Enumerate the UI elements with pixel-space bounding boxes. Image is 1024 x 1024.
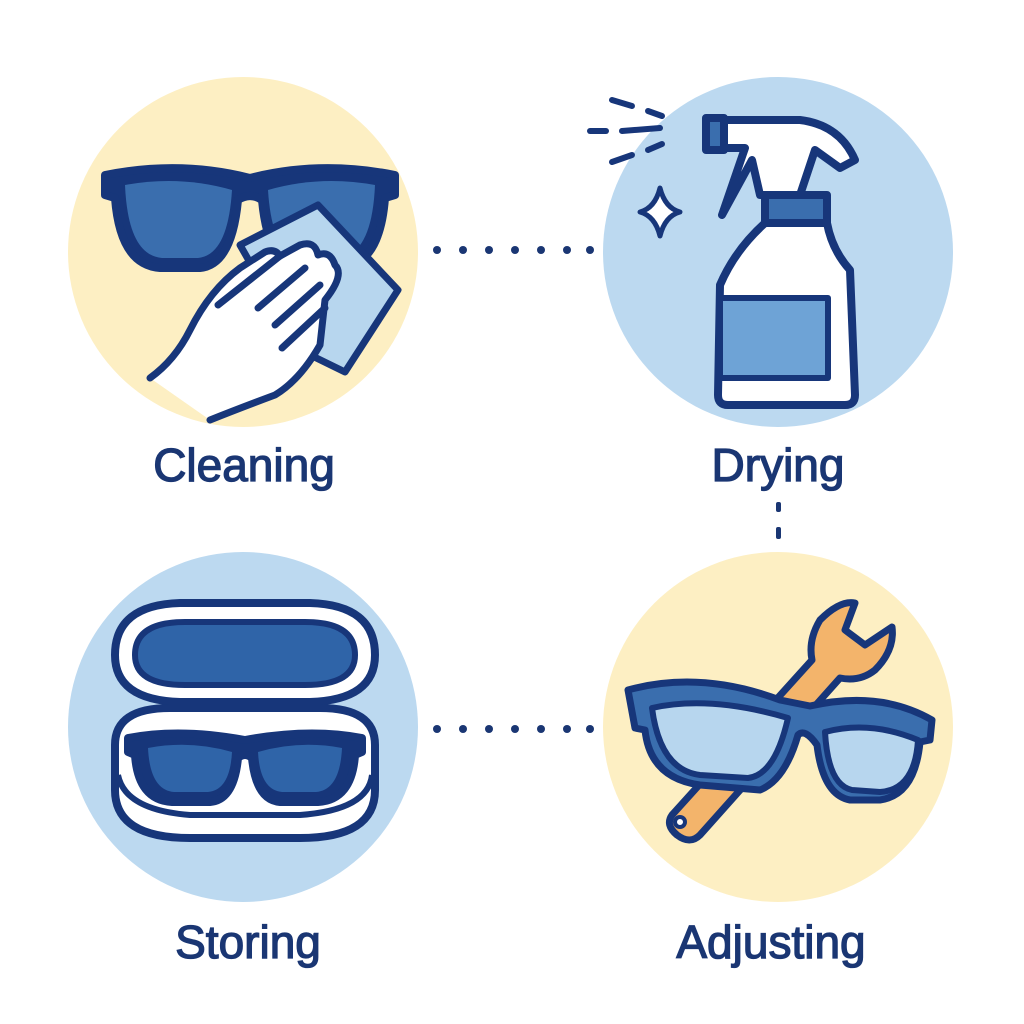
connector: drying to adjusting bbox=[776, 502, 781, 539]
icon: glasses bbox=[628, 682, 932, 800]
connector: storing to adjusting bbox=[433, 725, 594, 733]
icon: sparkle bbox=[640, 188, 680, 236]
icon: wrench bbox=[669, 603, 892, 840]
icon: spray bottle bbox=[706, 118, 855, 405]
icon: cloth bbox=[240, 205, 398, 372]
icon: spray lines bbox=[590, 100, 662, 162]
label: adjusting: Adjusting bbox=[676, 916, 866, 968]
label: storing: Storing bbox=[175, 916, 321, 968]
panel: cleaning bbox=[68, 77, 418, 427]
icon: sunglasses bbox=[105, 168, 395, 268]
panel: adjusting bbox=[603, 552, 953, 902]
panel: storing bbox=[68, 552, 418, 902]
icon: glasses case bbox=[115, 603, 375, 838]
label: drying: Drying bbox=[712, 439, 844, 491]
panel: drying bbox=[590, 77, 953, 427]
label: cleaning: Cleaning bbox=[153, 439, 335, 491]
connector: cleaning to drying bbox=[433, 246, 594, 254]
icon: hand bbox=[150, 244, 338, 420]
